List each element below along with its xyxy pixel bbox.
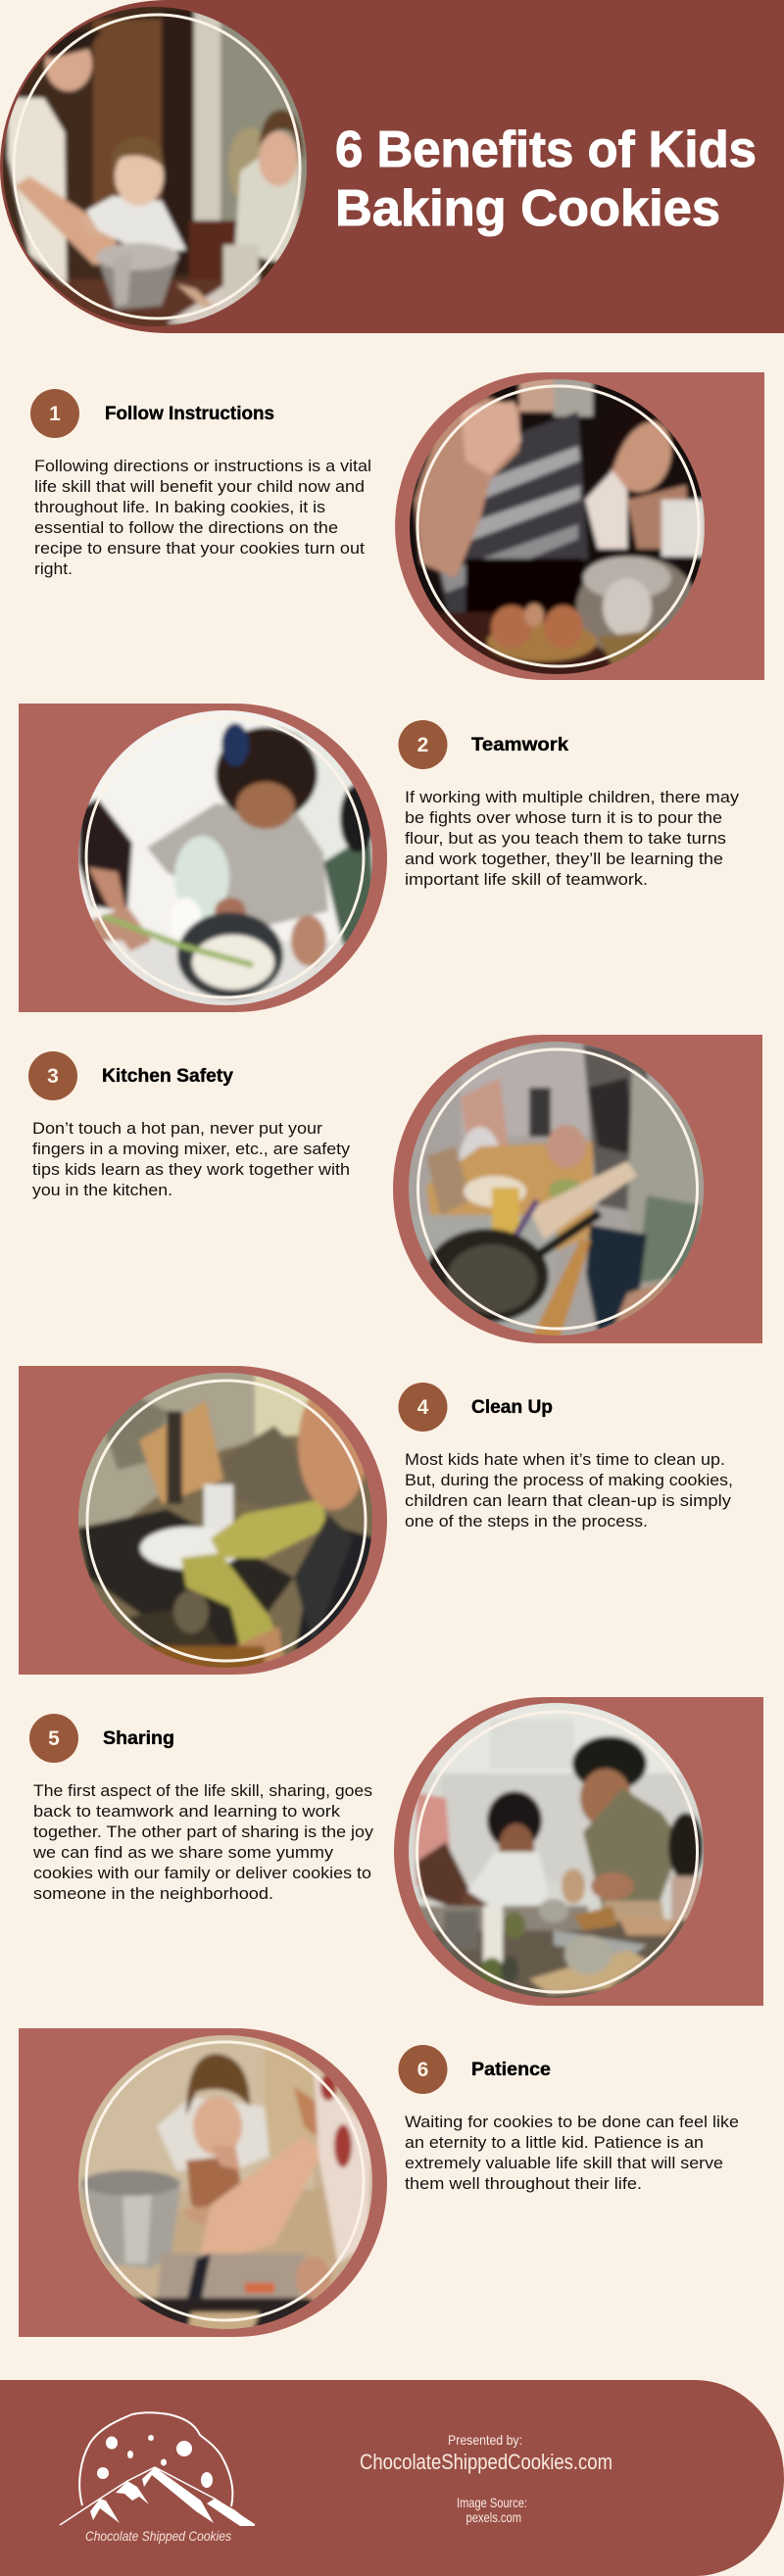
body text: be fights over whose turn it is to pour the: [405, 808, 722, 827]
white ring: [87, 1381, 366, 1661]
title: [335, 122, 757, 237]
body text: an eternity to a little kid. Patience is an: [405, 2133, 704, 2152]
number badge 2: [398, 720, 447, 769]
panel: 5 sharing: [29, 1697, 763, 2006]
number badge 5: 5: [48, 1727, 60, 1750]
mountains: [60, 2467, 255, 2526]
photo backing shape: [395, 372, 764, 680]
photo: child pouring into bowl: [410, 379, 705, 674]
white ring: [14, 15, 300, 318]
cookie outline: [79, 2412, 232, 2506]
number badge 2: 2: [417, 734, 428, 756]
photo: brushing a frying pan: [402, 1039, 715, 1342]
heading: Clean Up: [471, 1397, 553, 1418]
heading: Kitchen Safety: [102, 1066, 233, 1087]
body text: fingers in a moving mixer, etc., are safety: [32, 1140, 351, 1158]
body text: right.: [34, 559, 73, 578]
panel: 2 teamwork: [19, 704, 740, 1012]
image source: Image Source:: [457, 2495, 527, 2510]
body text: and work together, they’ll be learning the: [405, 850, 723, 868]
body text: flour, but as you teach them to take turns: [405, 829, 726, 848]
body text: extremely valuable life skill that will serve: [405, 2154, 723, 2172]
body text: essential to follow the directions on the: [34, 518, 338, 537]
number badge 6: 6: [417, 2059, 428, 2081]
body text: recipe to ensure that your cookies turn out: [34, 539, 365, 558]
body text: important life skill of teamwork.: [405, 870, 648, 889]
header banner: [0, 0, 784, 338]
white ring: [86, 2042, 364, 2320]
website: ChocolateShippedCookies.com: [360, 2450, 612, 2474]
photo: family preparing food: [402, 1700, 715, 2004]
body text: someone in the neighborhood.: [33, 1884, 273, 1903]
body text: back to teamwork and learning to work: [33, 1802, 341, 1821]
heading: Teamwork: [471, 735, 568, 755]
body text: Waiting for cookies to be done can feel like: [405, 2113, 739, 2131]
photo: children pouring milk: [69, 705, 382, 1009]
number badge 6: [398, 2045, 447, 2094]
white ring: [417, 1712, 698, 1992]
footer band: [0, 2380, 784, 2576]
panel: 6 patience: [19, 2028, 739, 2337]
number badge 1: [30, 389, 79, 438]
image source: [457, 2495, 527, 2525]
panel: 1 follow instructions: [30, 372, 764, 681]
body text: If working with multiple children, there may: [405, 788, 740, 806]
number badge 3: 3: [47, 1065, 59, 1088]
photo backing shape: [19, 704, 387, 1012]
body text: children can learn that clean-up is simply: [405, 1491, 732, 1510]
body text: life skill that will benefit your child now and: [34, 477, 365, 496]
heading: Follow Instructions: [105, 404, 274, 424]
body text: [405, 788, 740, 889]
title: Baking Cookies: [335, 180, 720, 237]
body text: [405, 1450, 733, 1531]
white ring: [417, 386, 699, 666]
chocolate chips: [97, 2435, 213, 2488]
photo: child washing dishes: [78, 1373, 372, 1668]
number badge 3: [28, 1051, 77, 1100]
body text: Most kids hate when it’s time to clean up.: [405, 1450, 725, 1469]
body text: throughout life. In baking cookies, it is: [34, 498, 325, 516]
header band: [0, 0, 784, 333]
logo: cookie and mountains: [60, 2412, 255, 2544]
body text: cookies with our family or deliver cookies to: [33, 1864, 371, 1882]
white ring: [86, 717, 364, 997]
photo: mother and children baking: [0, 0, 314, 338]
title: 6 Benefits of Kids: [335, 122, 757, 178]
body text: [405, 2113, 739, 2193]
photo: boy watching cookies: [69, 2033, 382, 2337]
image source: pexels.com: [466, 2509, 521, 2525]
number badge 4: [398, 1383, 447, 1432]
body text: you in the kitchen.: [32, 1181, 172, 1199]
body text: one of the steps in the process.: [405, 1512, 648, 1531]
number badge 5: [29, 1714, 78, 1763]
body text: [32, 1781, 374, 1903]
heading: Patience: [471, 2060, 551, 2080]
body text: Following directions or instructions is a vital: [34, 457, 371, 475]
body text: tips kids learn as they work together with: [32, 1160, 350, 1179]
body text: together. The other part of sharing is the joy: [33, 1823, 374, 1841]
photo backing shape: [19, 2028, 387, 2337]
body text: The first aspect of the life skill, sharing, goes: [33, 1781, 372, 1800]
white ring: [417, 1049, 698, 1329]
photo backing shape: [394, 1697, 763, 2006]
panel: 3 kitchen safety: [28, 1035, 762, 1343]
number badge 1: 1: [49, 403, 61, 425]
panel: 4 clean up: [19, 1366, 733, 1676]
presented by: Presented by:: [448, 2432, 522, 2448]
body text: But, during the process of making cookies,: [405, 1471, 733, 1489]
body text: [32, 1119, 351, 1199]
logo wordmark: Chocolate Shipped Cookies: [85, 2528, 231, 2544]
body text: Don’t touch a hot pan, never put your: [32, 1119, 322, 1138]
number badge 4: 4: [417, 1396, 429, 1419]
body text: them well throughout their life.: [405, 2174, 642, 2193]
body text: we can find as we share some yummy: [32, 1843, 334, 1862]
body text: [34, 457, 371, 578]
photo backing shape: [393, 1035, 762, 1343]
photo backing shape: [19, 1366, 387, 1675]
footer: [0, 2380, 784, 2576]
heading: Sharing: [103, 1728, 174, 1749]
